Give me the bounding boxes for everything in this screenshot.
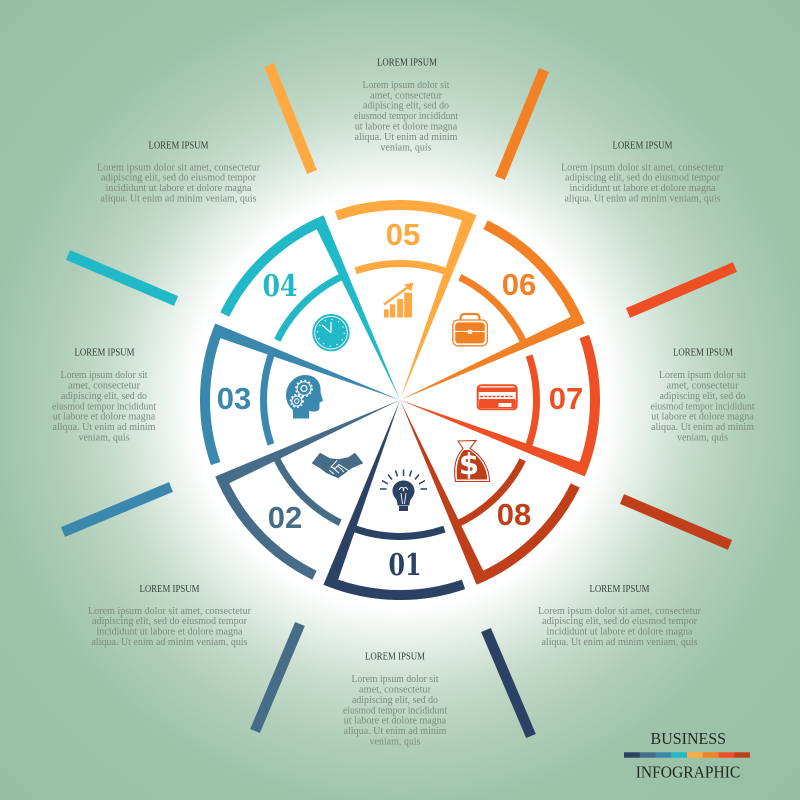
text block: 08 (538, 584, 702, 648)
tick: 04 (68, 255, 176, 301)
text block: 06: LOREM IPSUM (612, 140, 673, 152)
tick: 08 (622, 499, 730, 545)
tick: 05 (269, 65, 312, 172)
number 03: 03 (217, 381, 251, 416)
text block: 06: incididunt ut labore et dolore magna (570, 183, 716, 194)
tick: 02 (255, 624, 300, 731)
text block: 01: eiusmod tempor incididunt (343, 705, 447, 716)
text block: 07: aliqua. Ut enim ad minim (651, 422, 754, 433)
title: business infographic: BUSINESS (651, 729, 726, 748)
text block: 04: LOREM IPSUM (148, 140, 209, 152)
text block: 01: adipiscing elit, sed do (352, 695, 438, 706)
text block: 07: LOREM IPSUM (673, 348, 733, 358)
number 02: 02 (268, 500, 302, 535)
title: business infographic: INFOGRAPHIC (636, 762, 740, 781)
sector 03 frame (200, 323, 400, 465)
icon: head with gears (286, 375, 323, 418)
text block: 02 (88, 584, 252, 648)
icon: credit card (478, 385, 517, 409)
text block: 01: LOREM IPSUM (365, 652, 425, 662)
number 05: 05 (386, 217, 420, 252)
text block: 05: Lorem ipsum dolor sit (362, 80, 450, 91)
icon: briefcase (453, 314, 487, 346)
icon: growth chart (384, 282, 414, 318)
text block: 07: adipiscing elit, sed do (660, 391, 746, 402)
number 04: 04 (262, 269, 298, 304)
text block: 04: incididunt ut labore et dolore magna (106, 183, 252, 194)
text block: 05: adipiscing elit, sed do (363, 101, 449, 112)
text block: 05: ut labore et dolore magna (355, 122, 458, 132)
text block: 07: ut labore et dolore magna (651, 412, 754, 423)
text block: 07: Lorem ipsum dolor sit (659, 370, 746, 381)
panel: sector 05 (335, 200, 477, 400)
text block: 04: aliqua. Ut enim ad minim veniam, quis (100, 194, 257, 204)
text block: 03: veniam, quis (78, 433, 130, 444)
text block: 02: adipiscing elit, sed do eiusmod tempor (92, 616, 248, 627)
icon: handshake (312, 453, 363, 478)
tick: 07 (628, 267, 735, 313)
text block: 05 (354, 58, 458, 154)
title colour bar (624, 752, 750, 758)
sector 06 frame (354, 213, 596, 454)
text block: 01: ut labore et dolore magna (344, 716, 447, 727)
text block: 05: LOREM IPSUM (377, 58, 437, 68)
text block: 07: veniam, quis (677, 433, 728, 444)
tick: 03 (63, 487, 171, 532)
text block: 01 (343, 652, 447, 748)
text block: 08: adipiscing elit, sed do eiusmod tempor (542, 616, 698, 627)
panel: sector 02 (204, 346, 446, 587)
title: business infographic (624, 729, 750, 781)
number 06: 06 (502, 267, 536, 302)
text block: 05: eiusmod tempor incididunt (354, 111, 458, 122)
text block: 08: aliqua. Ut enim ad minim veniam, quis (542, 637, 698, 648)
number 08: 08 (497, 497, 531, 532)
text block: 03: ut labore et dolore magna (53, 412, 156, 423)
panel: sector 01 (323, 400, 465, 600)
text block: 03 (52, 348, 156, 444)
sector 08 frame (346, 354, 587, 596)
text block: 01: aliqua. Ut enim ad minim (344, 726, 447, 737)
text block: 03: amet, consectetur (68, 380, 141, 392)
text block: 07: eiusmod tempor incididunt (650, 401, 755, 412)
text block: 06: adipiscing elit, sed do eiusmod tempor (565, 173, 721, 184)
text block: 03: LOREM IPSUM (74, 348, 135, 358)
text block: 03: aliqua. Ut enim ad minim (52, 422, 156, 433)
text block: 04 (97, 140, 261, 204)
tick: 06 (500, 70, 544, 178)
panel: sector 07 (400, 335, 600, 477)
text block: 07 (650, 348, 755, 444)
text block: 08: LOREM IPSUM (590, 584, 650, 595)
text block: 03: adipiscing elit, sed do (61, 391, 147, 402)
text block: 08: Lorem ipsum dolor sit amet, consectetur (538, 606, 702, 617)
text block: 01: veniam, quis (370, 737, 421, 748)
text block: 06 (561, 140, 725, 204)
icon: money bag (455, 440, 490, 482)
number 01: 01 (388, 548, 422, 583)
text block: 02: LOREM IPSUM (140, 584, 200, 595)
panel: sector 08 (346, 354, 587, 596)
sector 02 frame (204, 346, 446, 587)
text block: 06: aliqua. Ut enim ad minim veniam, quis (564, 194, 721, 204)
sector 04 frame (213, 204, 454, 446)
text block: 03: eiusmod tempor incididunt (52, 401, 156, 412)
tick: 01 (486, 630, 531, 736)
text block: 04: Lorem ipsum dolor sit amet, consectetur (97, 162, 261, 173)
text block: 07: amet, consectetur (666, 380, 739, 392)
sector 05 frame (335, 200, 477, 400)
text block: 04: adipiscing elit, sed do eiusmod tempor (101, 173, 257, 184)
text block: 02: incididunt ut labore et dolore magna (96, 626, 243, 638)
panel: sector 04 (213, 204, 454, 446)
sector 07 frame (400, 335, 600, 477)
text block: 02: aliqua. Ut enim ad minim veniam, quis (92, 637, 248, 648)
text block: 06: Lorem ipsum dolor sit amet, consectetur (561, 162, 725, 173)
text block: 08: incididunt ut labore et dolore magna (546, 626, 693, 638)
number 07: 07 (549, 381, 583, 416)
panel: sector 03 (200, 323, 400, 465)
icon: money bag: $ (459, 448, 479, 482)
text block: 05: veniam, quis (380, 142, 432, 154)
icon: clock (312, 314, 350, 351)
icon: light bulb (380, 470, 427, 511)
text block: 02: Lorem ipsum dolor sit amet, consectetur (88, 606, 252, 617)
text block: 05: aliqua. Ut enim ad minim (354, 132, 458, 143)
sector 01 frame (323, 400, 465, 600)
text block: 01: amet, consectetur (359, 684, 432, 696)
text block: 05: amet, consectetur (370, 90, 443, 101)
text block: 03: Lorem ipsum dolor sit (60, 370, 148, 381)
panel: sector 06 (354, 213, 596, 454)
text block: 01: Lorem ipsum dolor sit (352, 674, 439, 685)
